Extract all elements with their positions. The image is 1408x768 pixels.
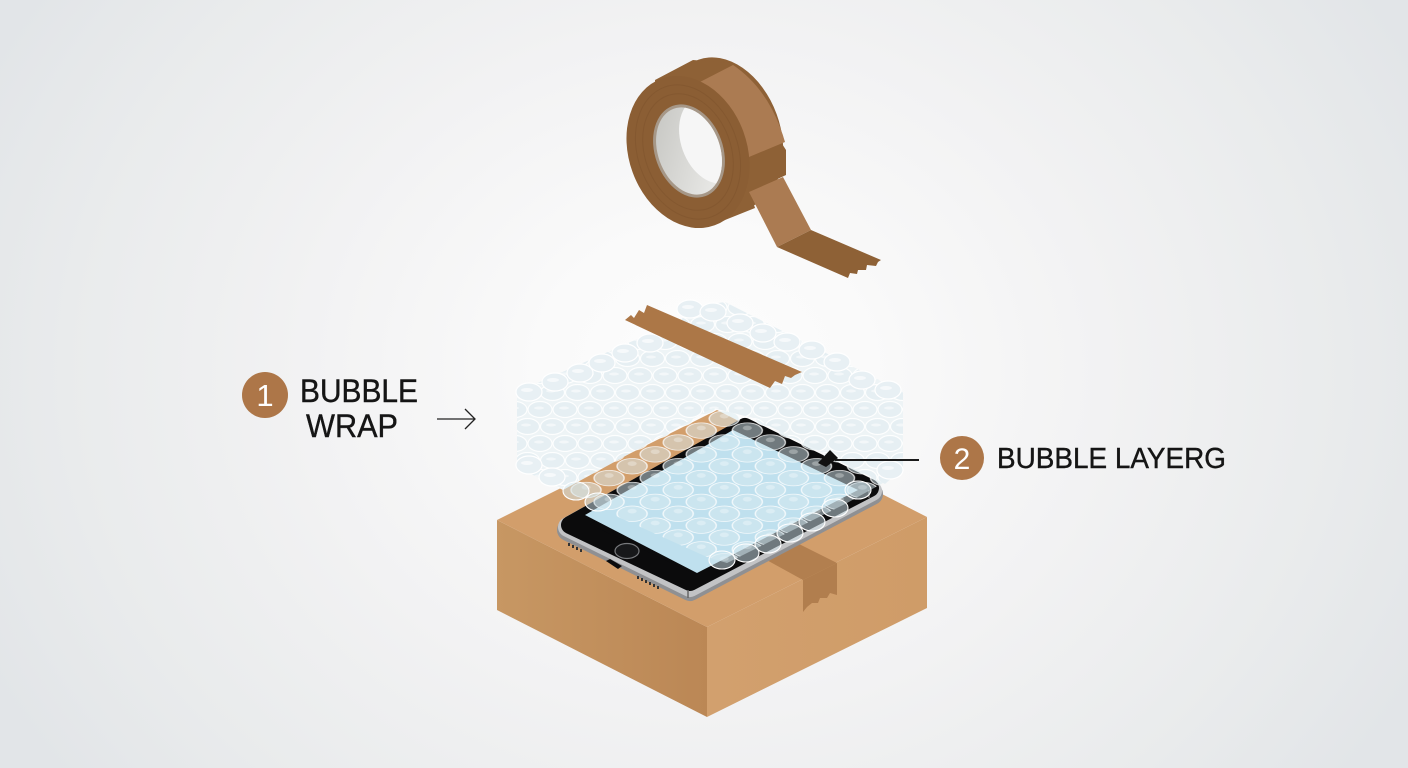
speakers	[569, 543, 658, 589]
box tape front	[803, 563, 837, 612]
badge 1: 1	[256, 378, 274, 413]
phone screen	[585, 430, 858, 573]
side seam	[688, 490, 869, 598]
box tape top	[763, 543, 837, 580]
bubble wrap	[516, 300, 903, 569]
label 1: bubble wrap	[242, 372, 418, 444]
box left face	[497, 520, 707, 717]
label 1: bubble wrap: WRAP	[306, 408, 398, 444]
box right face	[707, 517, 927, 717]
phone rim	[568, 432, 872, 590]
leader line to bubble layer	[818, 450, 919, 467]
label 2: bubble layer	[940, 436, 1226, 480]
home button	[615, 544, 639, 558]
label text: BUBBLE LAYERG	[997, 443, 1226, 475]
badge 2	[940, 436, 984, 480]
badge 2: 2	[954, 443, 970, 476]
icon: tape roll	[626, 57, 881, 278]
tape strip hanging	[749, 177, 811, 247]
arrow to bubble wrap	[437, 409, 475, 429]
tape strip on wrap	[625, 305, 802, 388]
cardboard box	[497, 410, 927, 717]
phone face	[570, 427, 870, 582]
tape strip end	[777, 230, 881, 278]
bubble edge scallops	[516, 300, 903, 486]
phone	[568, 427, 872, 598]
label text: BUBBLE	[300, 373, 418, 409]
badge 1	[242, 372, 288, 418]
charging port	[606, 559, 622, 569]
bubble wrap over phone	[563, 408, 883, 563]
box top face	[497, 410, 927, 627]
bubble wrap upper sheet	[517, 302, 903, 490]
overlay edge bubbles	[563, 481, 871, 569]
